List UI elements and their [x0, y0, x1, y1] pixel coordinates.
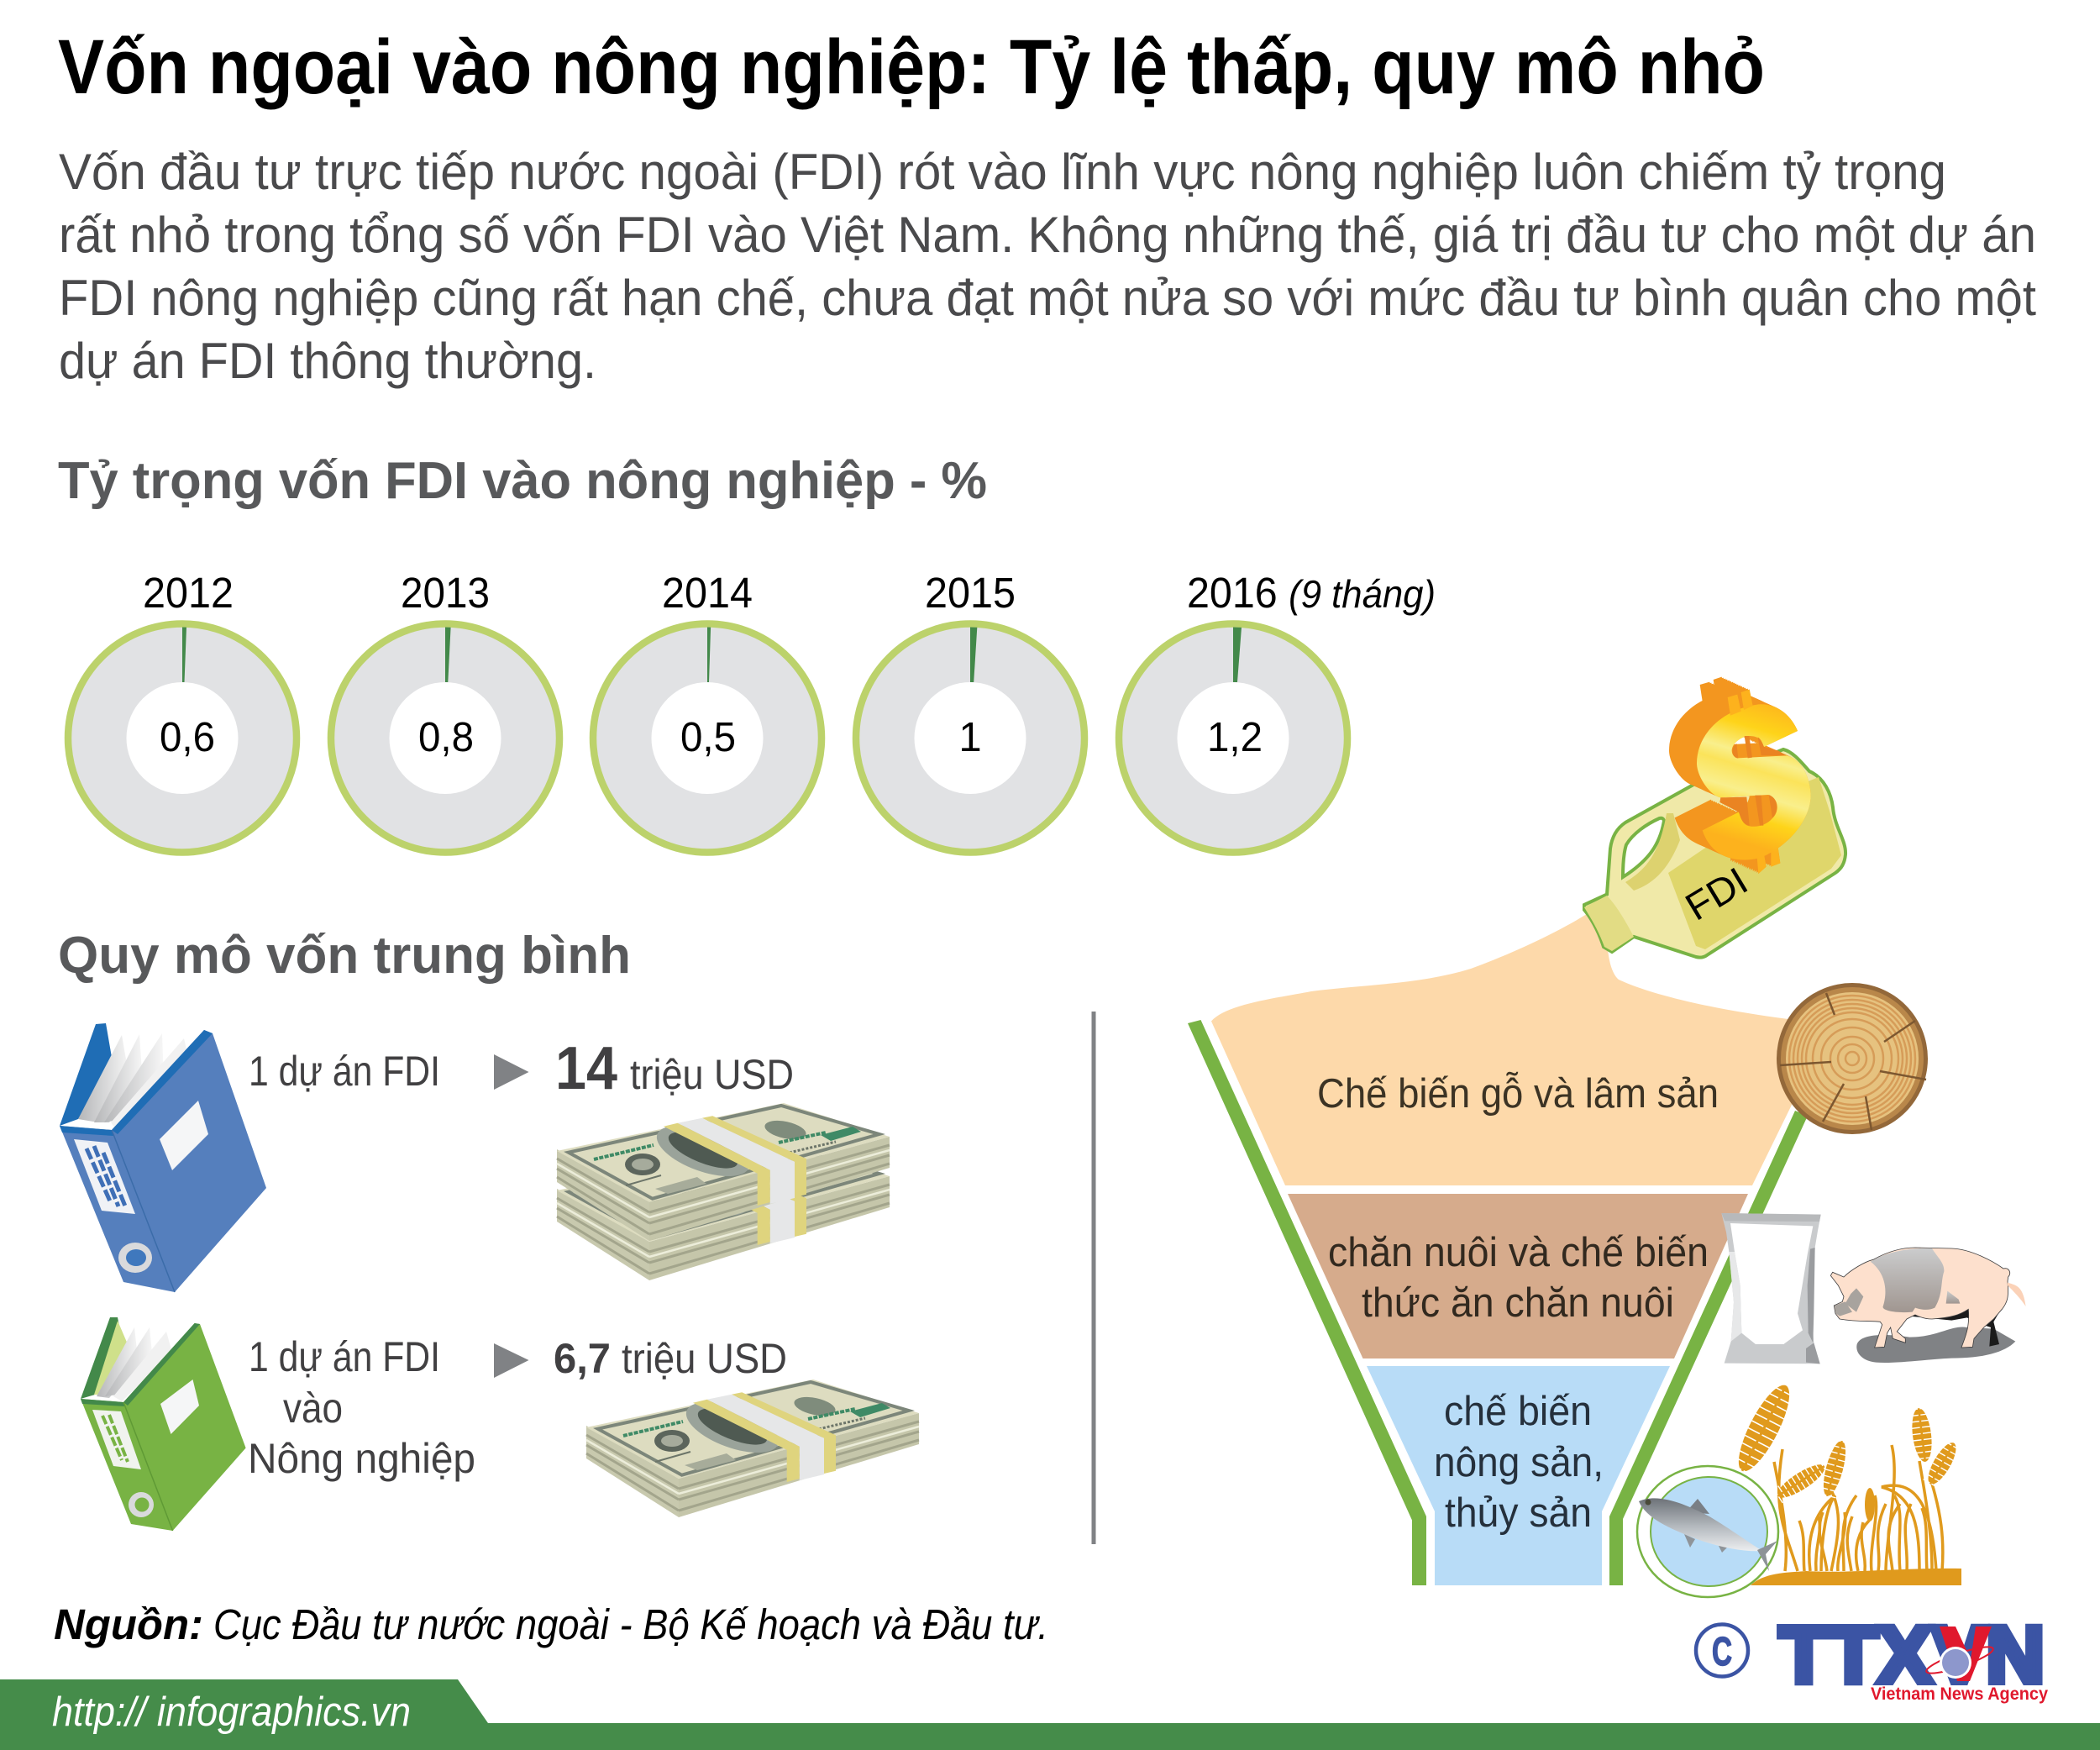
donut 2013: 0,8	[418, 715, 474, 760]
donut 2012: 0,6	[160, 715, 215, 760]
footer band: http:// infographics.vn	[52, 1690, 411, 1735]
funnel layer: livestock and feed	[1288, 1194, 1748, 1358]
value: 14 million USD: 14	[555, 1035, 617, 1102]
funnel layer: livestock and feed: thức ăn chăn nuôi	[1362, 1280, 1674, 1326]
donut 2016: 1,2	[1207, 715, 1263, 760]
intro text block	[59, 144, 2036, 389]
footer band	[0, 1679, 2100, 1750]
intro text block: FDI nông nghiệp cũng rất hạn chế, chưa đạt một nửa so với mức đầu tư bình quân cho một	[59, 270, 2036, 326]
funnel layer: agricultural and aquatic products: chế biến	[1444, 1389, 1592, 1434]
arrow	[494, 1343, 529, 1378]
funnel layer: agricultural and aquatic products	[1367, 1366, 1670, 1585]
funnel layer: agricultural and aquatic products: thủy sản	[1445, 1490, 1592, 1536]
wheat ears	[1730, 1380, 1961, 1521]
donut 2014: 2014	[662, 569, 753, 617]
icon: blue folder	[60, 1023, 266, 1292]
copyright mark	[1696, 1625, 1748, 1677]
icon: fish in circle	[1637, 1466, 1778, 1597]
donut 2014	[593, 569, 822, 852]
source note: Cục Đầu tư nước ngoài - Bộ Kế hoạch và Đầu tư.	[213, 1600, 1048, 1648]
title: Vốn ngoại vào nông nghiệp: Tỷ lệ thấp, quy mô nhỏ	[58, 24, 1765, 110]
donut 2012: 2012	[143, 569, 234, 617]
donut 2015: 1	[958, 715, 982, 760]
value: 6.7 million USD: 6,7	[554, 1335, 611, 1382]
funnel right wall	[1609, 1111, 1808, 1585]
source note: Nguồn:	[54, 1600, 203, 1648]
icon: wood log	[1777, 983, 1928, 1134]
donut charts: FDI share by year	[68, 569, 1436, 852]
row 2 label: one agricultural FDI project: vào	[283, 1385, 343, 1432]
arrow	[494, 1054, 529, 1090]
value: 6.7 million USD	[554, 1335, 787, 1382]
icon: wheat	[1730, 1380, 1961, 1585]
intro text block: dự án FDI thông thường.	[59, 333, 596, 389]
icon: green folder	[81, 1317, 246, 1531]
funnel layer: agricultural and aquatic products: nông sản,	[1434, 1440, 1604, 1485]
copyright mark: C	[1712, 1630, 1732, 1674]
icon: FDI canister	[1584, 749, 1845, 958]
vertical divider	[1092, 1012, 1095, 1544]
icon: stack of money	[586, 1380, 919, 1517]
row 1 label: one FDI project: 1 dự án FDI	[249, 1048, 440, 1095]
donut 2015: 2015	[925, 569, 1016, 617]
funnel layer: wood processing: Chế biến gỗ và lâm sản	[1317, 1071, 1719, 1117]
icon: FDI canister: FDI	[1677, 859, 1755, 929]
row 2 label: one agricultural FDI project: 1 dự án FDI	[249, 1333, 440, 1380]
value: 14 million USD	[555, 1035, 794, 1102]
dollar sign counter details	[1719, 736, 1787, 826]
icon: two stacks of money	[557, 1103, 890, 1280]
logo: TTXVN: Vietnam News Agency	[1871, 1684, 2048, 1704]
value: 14 million USD: triệu USD	[630, 1051, 794, 1098]
funnel chart	[1188, 914, 1808, 1585]
heading: average capital: Quy mô vốn trung bình	[58, 927, 631, 985]
donut 2016: 2016 (9 tháng)	[1187, 569, 1436, 617]
donut 2015	[856, 569, 1084, 852]
donut 2016	[1119, 569, 1436, 852]
funnel layer: wood processing	[1211, 914, 1793, 1185]
logo: TTXVN: TTXVN	[1779, 1611, 2045, 1700]
intro text block: Vốn đầu tư trực tiếp nước ngoài (FDI) rót vào lĩnh vực nông nghiệp luôn chiếm tỷ trọng	[59, 144, 1946, 200]
intro text block: rất nhỏ trong tổng số vốn FDI vào Việt Nam. Không những thế, giá trị đầu tư cho một dự án	[59, 207, 2036, 263]
row 2 label: one agricultural FDI project	[248, 1333, 475, 1482]
icon: feed bag	[1721, 1213, 1821, 1364]
icon: pig	[1830, 1248, 2026, 1363]
donut 2012	[68, 569, 297, 852]
icon: 3D dollar sign	[1697, 690, 1811, 874]
funnel left wall	[1188, 1020, 1426, 1585]
donut 2013	[331, 569, 559, 852]
funnel layer: livestock and feed: chăn nuôi và chế biến	[1328, 1230, 1709, 1275]
row 2 label: one agricultural FDI project: Nông nghiệp	[248, 1435, 475, 1482]
donut 2013: 2013	[401, 569, 490, 617]
donut 2014: 0,5	[680, 715, 736, 760]
value: 6.7 million USD: triệu USD	[622, 1335, 787, 1382]
heading: FDI share: Tỷ trọng vốn FDI vào nông nghiệp - %	[58, 452, 987, 510]
